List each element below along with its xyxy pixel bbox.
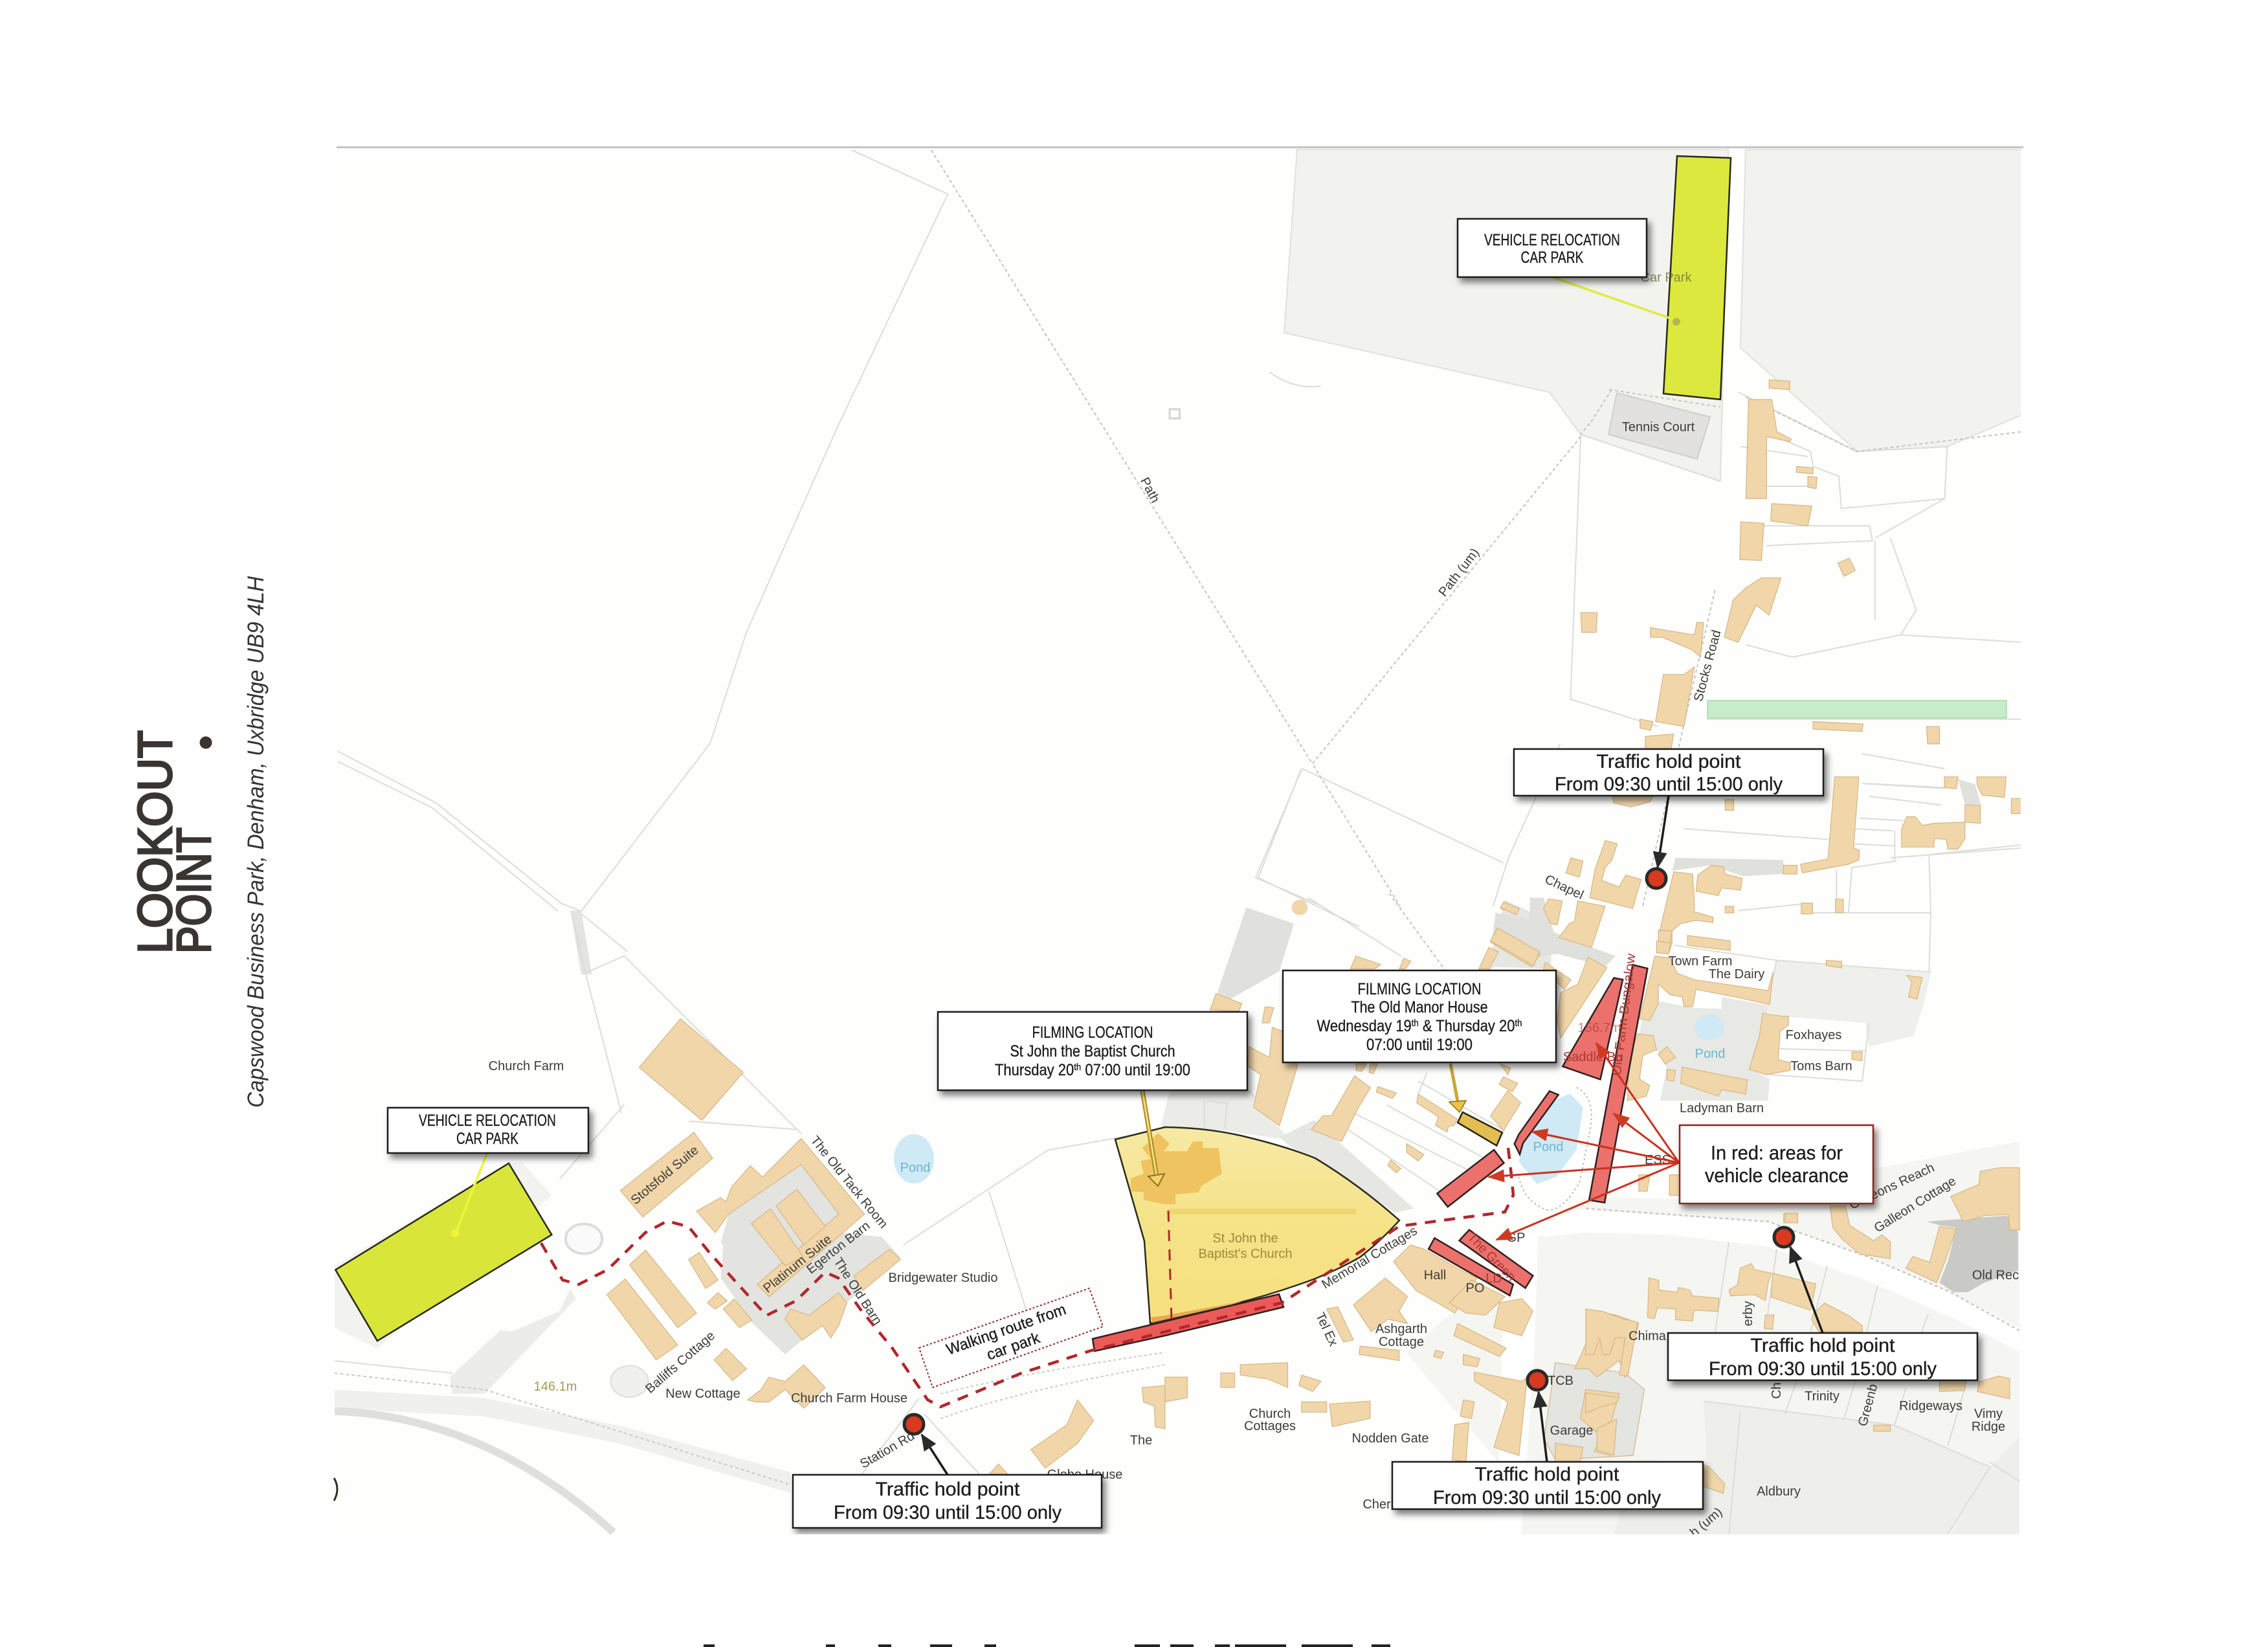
tennis court [1608, 393, 1710, 459]
map place labels: Pond [1533, 1140, 1563, 1154]
map place labels: Tel Ex [1313, 1310, 1340, 1349]
buildings: north [1581, 379, 1939, 749]
map place labels: Cher [1362, 1497, 1391, 1512]
callout: filming location church: Thursday 20 [995, 1061, 1085, 1079]
map place labels: Tennis Court [1622, 420, 1695, 434]
terrain: car park field [1284, 150, 2023, 481]
map place labels: Pond [900, 1161, 930, 1175]
map place labels: Greenb [1856, 1382, 1880, 1428]
callout: in red vehicle clearance: In red: areas for [1711, 1141, 1843, 1164]
callout: in red vehicle clearance: vehicle clearance [1705, 1164, 1849, 1187]
map labels printed through red areas: The Green [1465, 1230, 1518, 1284]
arrow: north car park [1552, 277, 1680, 326]
callout: filming location manor house: The Old Manor House [1351, 998, 1487, 1016]
callout: traffic hold south: Traffic hold point [1474, 1464, 1619, 1485]
walking route label: car park [984, 1329, 1043, 1364]
callout: filming location manor house [1283, 970, 1556, 1062]
callout: traffic hold east: From 09:30 until 15:00 only [1709, 1358, 1937, 1380]
map place labels: Church [1249, 1407, 1291, 1421]
map place labels: The Old Tack Room [808, 1134, 891, 1231]
callout: in red vehicle clearance [1680, 1125, 1873, 1204]
callout: traffic hold east [1668, 1333, 1977, 1380]
map place labels: Ashgarth [1375, 1322, 1427, 1336]
map labels printed through red areas: Saddle Bu [1563, 1050, 1623, 1064]
callout: filming location manor house: Wednesday 19 [1317, 1017, 1425, 1035]
vehicle relocation car park: west [335, 1163, 551, 1341]
map place labels: The [1130, 1433, 1152, 1448]
callout: north car park: VEHICLE RELOCATION [1484, 231, 1620, 249]
callout: filming location church: th [1074, 1062, 1081, 1073]
callout: filming location church: St John the Baptist Church [1010, 1042, 1175, 1060]
map place labels: Ridgeways [1899, 1399, 1962, 1413]
callout: traffic hold Station Road: From 09:30 until 15:00 only [834, 1502, 1062, 1523]
filming area: St John the Baptist church grounds: St John the [1212, 1231, 1278, 1246]
walking route label [919, 1288, 1103, 1387]
map place labels: Ch [1770, 1382, 1784, 1399]
vehicle clearance strip by the church [1093, 1294, 1284, 1351]
green hedge strip [1707, 700, 2007, 718]
callout: west car park [388, 1108, 588, 1153]
callout: traffic hold east: Traffic hold point [1750, 1335, 1895, 1356]
map place labels: Vimy [1974, 1407, 2003, 1421]
field boundaries and footpaths [338, 150, 1359, 952]
map place labels: Path (um) [1436, 546, 1482, 599]
map place labels: Garage [1550, 1424, 1593, 1438]
callout: north car park [1458, 219, 1647, 277]
map place labels: erby [1741, 1301, 1755, 1326]
callout: filming location manor house: & Thursday 20 [1419, 1017, 1515, 1035]
map place labels: PO [1466, 1281, 1484, 1295]
map place labels: Galleon Cottage [1872, 1174, 1959, 1236]
vehicle clearance areas in red [1429, 965, 1647, 1295]
map place labels: Stocks Road [1691, 629, 1724, 703]
callout: traffic hold north [1514, 749, 1823, 796]
map place labels [489, 420, 2019, 1540]
map place labels: Town Farm [1669, 954, 1732, 969]
buildings: east [1586, 1168, 2019, 1494]
scan mark at map edge [334, 1478, 337, 1501]
map place labels: Cottage [1379, 1335, 1424, 1349]
callout: west car park: CAR PARK [456, 1130, 518, 1148]
map place labels: Nodden Gate [1352, 1431, 1429, 1446]
map place labels: The Old Barn [830, 1255, 885, 1328]
callout: filming location church: 07:00 until 19:00 [1081, 1061, 1190, 1079]
north lanes and plot lines [1256, 390, 2022, 906]
arrow: church location [1142, 1091, 1164, 1186]
map place labels: Path [1137, 475, 1162, 506]
map place labels: h (um) [1687, 1505, 1725, 1540]
map place labels: Old Rec [1972, 1268, 2019, 1283]
callout: traffic hold north: Traffic hold point [1596, 751, 1741, 772]
buildings: manor house area [1210, 900, 1540, 1173]
map place labels: Station Rd [858, 1429, 917, 1472]
map place labels: Platinum Suite [761, 1232, 834, 1295]
map place labels: 146.1m [534, 1380, 577, 1394]
map [335, 148, 2023, 1540]
map place labels: Ridge [1972, 1420, 2005, 1434]
map place labels: Memorial Cottages [1319, 1224, 1420, 1292]
logo: Lookout Point: LOOKOUT [128, 730, 182, 954]
callout: filming location manor house: 07:00 until 19:00 [1366, 1036, 1473, 1054]
vehicle relocation car park: north [1663, 156, 1731, 399]
church building [1131, 1133, 1221, 1204]
buildings: Stocks Road and Town Farm [1489, 777, 2021, 1101]
map place labels: Egerton Barn [804, 1218, 873, 1277]
car park map label: Car Park [1641, 271, 1692, 285]
terrain: south-east fields [1406, 1141, 2019, 1536]
logo: Lookout Point [128, 730, 221, 954]
address: Capswood Business Park, Denham, Uxbridge UB9 4LH [243, 576, 269, 1108]
map place labels: Stotsfold Suite [628, 1143, 702, 1207]
arrows to traffic hold points [922, 796, 1823, 1475]
callout: north car park: CAR PARK [1521, 249, 1584, 267]
map place labels: Chima [1629, 1329, 1667, 1343]
map place labels: TCB [1548, 1374, 1573, 1388]
arrow: west car park [451, 1152, 487, 1237]
callout: traffic hold north: From 09:30 until 15:00 only [1555, 774, 1783, 795]
terrain: road corridors and yards [1161, 779, 1981, 1213]
map labels printed through red areas: 156.7m [1578, 1021, 1621, 1035]
callout: filming location manor house: FILMING LOCATION [1358, 980, 1481, 998]
map place labels: Ladyman Barn [1680, 1101, 1764, 1115]
map place labels: Balliffs Cottage [643, 1328, 718, 1396]
map place labels: Chapel [1542, 872, 1586, 902]
map place labels: New Cottage [665, 1387, 740, 1401]
map place labels: The Dairy [1709, 967, 1764, 981]
filming area: St John the Baptist church grounds: Baptist's Church [1199, 1247, 1292, 1261]
pond dotted outline [1518, 1088, 1592, 1210]
buildings: west complex [607, 1019, 1165, 1474]
callout: traffic hold Station Road [793, 1475, 1102, 1528]
map place labels: GP [1507, 1231, 1525, 1245]
map place labels: Toms Barn [1790, 1059, 1852, 1073]
callout: traffic hold south [1392, 1462, 1703, 1509]
arrows from vehicle clearance callout [1489, 1043, 1679, 1240]
filming area: Old Manor House marker [1458, 1112, 1502, 1146]
cut-off footer text [704, 1644, 1390, 1647]
map labels printed through red areas [1465, 952, 1639, 1286]
map place labels: Church Farm House [791, 1391, 907, 1406]
map place labels: Church Farm [489, 1059, 564, 1073]
callout: filming location church [938, 1012, 1247, 1090]
terrain: west complex and roads [335, 910, 1165, 1532]
walking route label: Walking route from [944, 1301, 1069, 1359]
map place labels: Cottages [1244, 1419, 1296, 1433]
traffic hold points [904, 869, 1794, 1434]
map place labels: Aldbury [1757, 1485, 1801, 1499]
map place labels: Trinity [1805, 1389, 1840, 1404]
ponds [894, 1014, 1724, 1184]
map place labels: Bridgewater Studio [889, 1271, 997, 1285]
callout: west car park: VEHICLE RELOCATION [419, 1112, 556, 1130]
walking route dashed line [541, 1148, 1513, 1407]
callout: traffic hold south: From 09:30 until 15:00 only [1433, 1487, 1661, 1508]
map top edge line [337, 146, 2023, 148]
callout: filming location church: FILMING LOCATION [1032, 1024, 1153, 1042]
map place labels: Hall [1424, 1268, 1446, 1283]
callout: traffic hold Station Road: Traffic hold point [875, 1479, 1020, 1500]
filming area: St John the Baptist church grounds [1115, 1127, 1399, 1323]
east plot lines [1674, 783, 2021, 1081]
callout: filming location manor house: th [1515, 1018, 1522, 1029]
map base [335, 148, 2021, 1534]
map place labels: Galleons Reach [1847, 1161, 1937, 1213]
map labels printed through red areas: Old Farm Bungalow [1610, 952, 1639, 1077]
callout: filming location manor house: th [1412, 1018, 1419, 1029]
arrow: manor house location [1449, 1064, 1466, 1112]
map place labels: ESS [1645, 1153, 1671, 1167]
church and village garden lines [1205, 893, 1505, 1200]
map place labels: Pond [1695, 1047, 1725, 1061]
map place labels: Foxhayes [1786, 1028, 1841, 1042]
map labels printed through red areas: LD [1485, 1272, 1502, 1286]
buildings: south of the green [1165, 1175, 1797, 1462]
logo: Lookout Point: POINT [167, 827, 221, 954]
map place labels: Glebe House [1047, 1468, 1122, 1482]
